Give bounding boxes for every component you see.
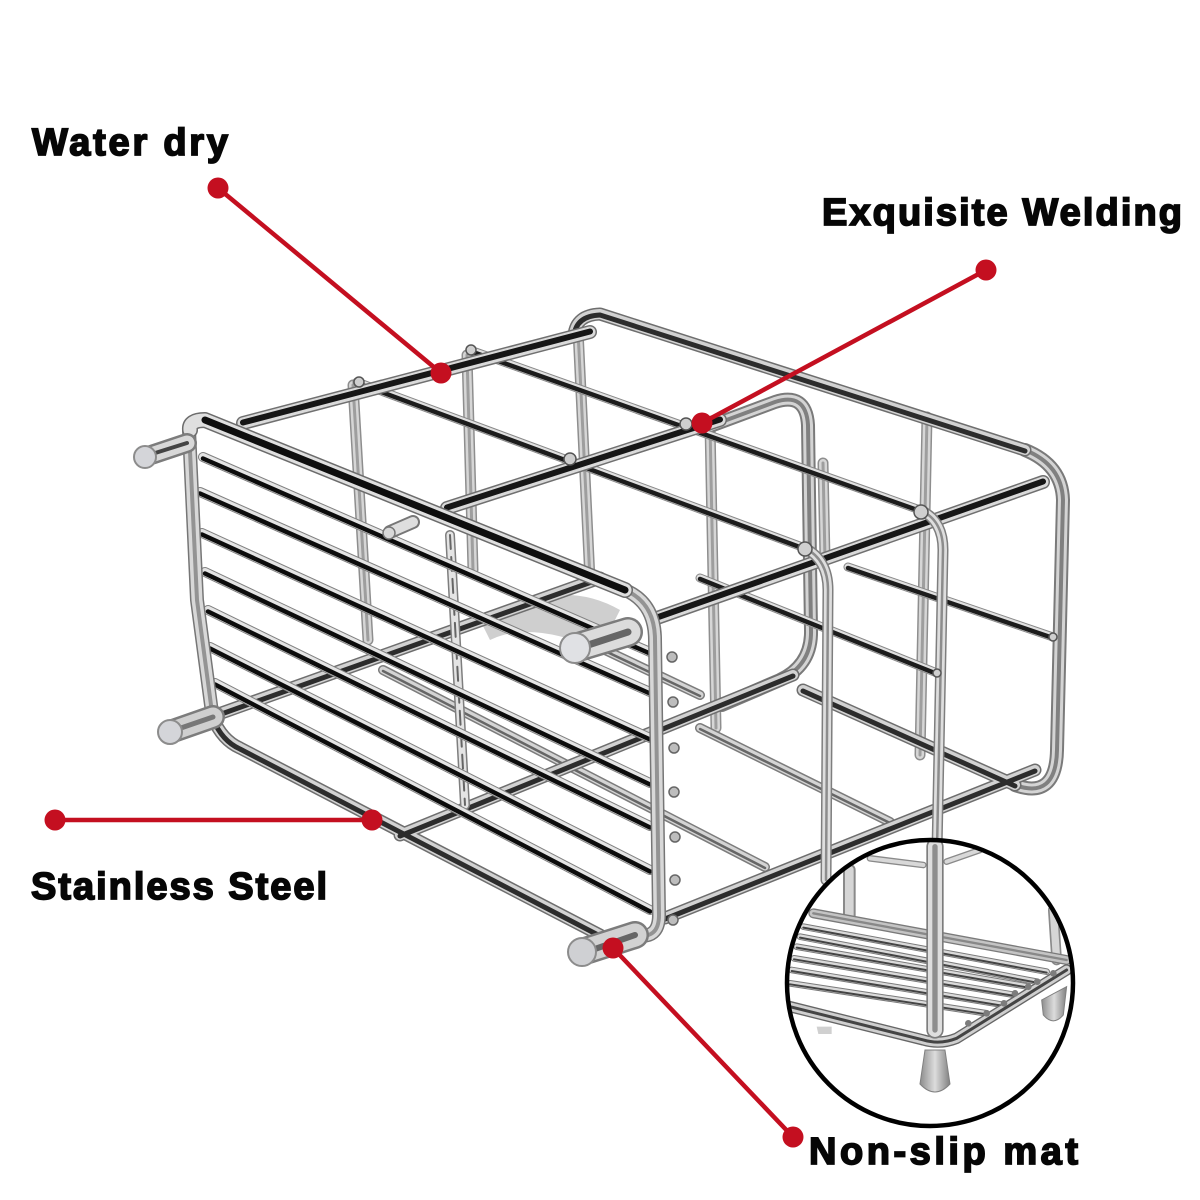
callout: water dry xyxy=(32,122,452,384)
callout: exquisite welding xyxy=(692,192,1182,434)
inset wire ends xyxy=(965,970,1057,1027)
water dry label: Water dry xyxy=(32,122,228,164)
inset floor wires xyxy=(790,927,1047,1014)
front frame xyxy=(189,420,659,945)
water dry leader line xyxy=(208,178,452,384)
inner U frame and right bend xyxy=(705,400,1063,788)
welding leader line xyxy=(692,260,996,434)
inset front edge xyxy=(790,970,1067,1042)
inset circle border xyxy=(787,840,1073,1126)
inset feet xyxy=(1042,987,1067,1021)
wire rack product illustration xyxy=(134,314,1063,966)
stainless label: Stainless Steel xyxy=(31,866,327,908)
wavy centre upright xyxy=(450,535,465,805)
wire end screws xyxy=(667,652,680,925)
inset main upright xyxy=(926,842,944,1039)
floor wires xyxy=(383,650,890,868)
back frame and floor bars xyxy=(213,314,1035,936)
weld knobs xyxy=(354,345,1057,677)
rubber tip pins xyxy=(134,443,635,966)
callout: stainless steel xyxy=(31,810,382,908)
reflection of rear bend xyxy=(480,595,620,650)
non-slip leader line xyxy=(602,938,804,1148)
inset frame wires xyxy=(813,850,1067,960)
callout: non-slip mat xyxy=(602,938,1078,1173)
non-slip label: Non-slip mat xyxy=(809,1131,1078,1173)
top and side thin wires xyxy=(357,350,1053,674)
side down bends xyxy=(805,510,943,880)
top thick crossbars xyxy=(243,332,1043,618)
back uprights xyxy=(353,330,927,755)
front wires xyxy=(200,457,650,912)
stainless leader line xyxy=(44,810,382,830)
welding label: Exquisite Welding xyxy=(822,192,1182,234)
inset: non-slip mat close-up xyxy=(787,840,1073,1126)
